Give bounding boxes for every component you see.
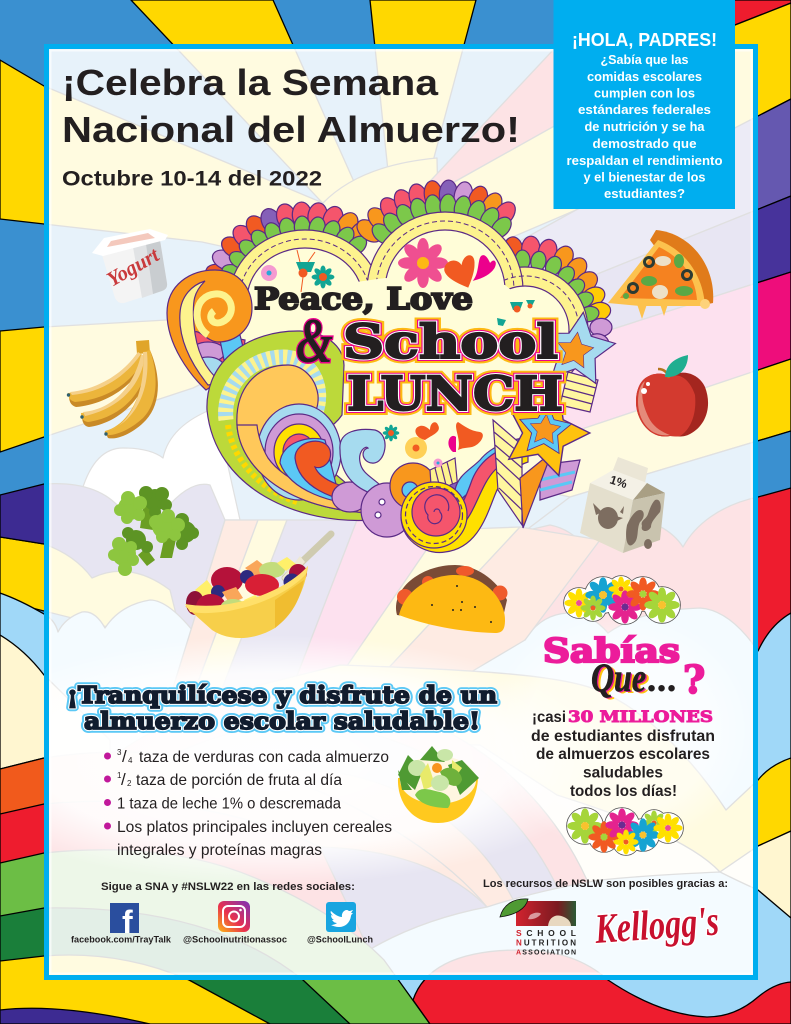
heading: tranquilicese: almuerzo escolar saludable!	[84, 708, 480, 735]
logo: stitched yellow bands and cream centre	[229, 212, 588, 500]
icon: yogurt	[92, 229, 168, 303]
icon: yogurt: Yogurt	[102, 242, 164, 291]
logo: School: School	[343, 315, 558, 370]
text: 30 millones: 30 MILLONES	[568, 707, 713, 726]
sponsors line: Los recursos de NSLW son posibles gracias a:	[483, 878, 728, 890]
list: lunch requirements: Los platos principales incluyen cereales	[117, 819, 392, 836]
logo: stars	[493, 307, 619, 528]
logo: LUNCH: LUNCH	[347, 367, 563, 422]
callout: hola padres: estándares federales	[578, 102, 711, 117]
icon: apple	[636, 355, 708, 437]
date: Octubre 10-14 del 2022	[62, 168, 322, 190]
heading: tranquilicese: ¡Tranquilícese y disfrute de un	[67, 682, 497, 709]
icon: facebook	[110, 903, 139, 940]
callout: hola padres: respaldan el rendimiento	[566, 153, 723, 168]
logo: LUNCH: LUNCH	[347, 367, 563, 422]
logo: School: School	[343, 315, 558, 370]
icon: instagram	[218, 901, 250, 932]
icon: salad bowl	[398, 746, 479, 823]
icon: broccoli	[108, 486, 199, 576]
heading: tranquilicese: almuerzo escolar saludable!	[84, 708, 480, 735]
list: lunch requirements: 2	[127, 779, 132, 788]
flowers: top cluster	[564, 576, 680, 624]
logo: Peace, Love & School Lunch	[167, 180, 619, 553]
icon: fruit bowl	[185, 534, 331, 638]
list: lunch requirements	[104, 747, 392, 859]
twitter handle: @SchoolLunch	[307, 934, 373, 946]
text: 30 millones: de almuerzos escolares	[536, 746, 710, 763]
heading: Sabias Que: Sabías	[543, 631, 680, 670]
title: Nacional del Almuerzo!	[62, 109, 520, 150]
callout: hola padres	[554, 0, 735, 209]
icon: taco	[396, 565, 508, 633]
callout: hola padres: estudiantes?	[604, 186, 685, 201]
heading: Sabias Que	[543, 631, 705, 702]
icon: bananas	[67, 340, 158, 438]
list: lunch requirements: 1 taza de leche 1% o descremada	[117, 796, 341, 812]
heading: Sabias Que: Que	[592, 656, 648, 701]
logo: scalloped flower petals	[203, 180, 613, 354]
list: lunch requirements: taza de porción de fruta al día	[136, 772, 342, 789]
callout: hola padres: ¿Sabía que las	[600, 52, 688, 67]
list: lunch requirements: /	[122, 747, 127, 766]
logo: School: School	[343, 315, 558, 370]
list: lunch requirements: 1	[117, 771, 122, 780]
logo: Kellogg's: Kellogg's	[593, 898, 720, 953]
logo: School Nutrition Association	[500, 899, 576, 956]
instagram handle: @Schoolnutritionassoc	[183, 934, 287, 946]
heading: Sabias Que: ?	[683, 657, 705, 702]
logo: School Nutrition Association: ASSOCIATION	[516, 950, 576, 956]
callout: hola padres: cumplen con los	[594, 86, 695, 100]
list: lunch requirements: taza de verduras con cada almuerzo	[139, 749, 389, 766]
heading: tranquilicese: ¡Tranquilícese y disfrute de un	[67, 682, 497, 709]
icon: facebook: f	[122, 904, 133, 940]
list: lunch requirements: integrales y proteínas magras	[117, 842, 322, 859]
logo: green swirl with stripes	[207, 331, 372, 520]
callout: hola padres: de nutrición y se ha	[584, 119, 705, 134]
logo: left orange spiral	[167, 270, 252, 390]
logo: ampersand: &	[296, 305, 333, 376]
list: lunch requirements: 3	[117, 748, 122, 757]
logo: small flowers and hearts	[261, 238, 535, 468]
logo: School Nutrition Association: S CHOOL	[516, 928, 576, 938]
logo: LUNCH: LUNCH	[347, 367, 563, 422]
callout: hola padres: demostrado que	[592, 136, 696, 151]
icon: milk carton: 1%	[608, 473, 629, 491]
list: lunch requirements: 4	[128, 756, 133, 765]
icon: pizza slice	[608, 230, 713, 319]
text: 30 millones: todos los días!	[570, 783, 677, 800]
logo: School Nutrition Association: N UTRITION	[516, 938, 576, 948]
heading: tranquilicese	[67, 682, 497, 735]
heading: Sabias Que: Que	[594, 657, 650, 702]
title	[62, 62, 520, 150]
logo: LUNCH: LUNCH	[347, 367, 563, 422]
text: 30 millones: de estudiantes disfrutan	[531, 728, 715, 745]
text: 30 millones	[531, 707, 715, 800]
logo: colourful waves	[237, 404, 385, 513]
facebook handle: facebook.com/TrayTalk	[71, 934, 172, 946]
list: lunch requirements: /	[121, 770, 126, 789]
heading: Sabias Que: ...	[648, 655, 678, 700]
callout: hola padres: comidas escolares	[587, 69, 702, 84]
logo: Peace, Love: Peace, Love	[254, 282, 473, 317]
heading: tranquilicese: almuerzo escolar saludable!	[84, 708, 480, 735]
logo: School: School	[343, 315, 558, 370]
social heading: Sigue a SNA y #NSLW22 en las redes sociales:	[101, 881, 355, 893]
heading: Sabias Que: Que	[591, 655, 646, 700]
icon: milk carton	[580, 457, 665, 553]
title: ¡Celebra la Semana	[62, 62, 439, 103]
callout: hola padres: ¡HOLA, PADRES!	[572, 30, 717, 50]
flowers: bottom cluster	[567, 808, 683, 855]
text: 30 millones: ¡casi	[532, 709, 566, 726]
heading: tranquilicese: ¡Tranquilícese y disfrute de un	[67, 682, 497, 709]
icon: twitter	[326, 902, 356, 932]
text: 30 millones: saludables	[583, 764, 663, 782]
logo: donut, lilac blob and bottom spiral with tail	[361, 438, 528, 553]
callout: hola padres: y el bienestar de los	[584, 170, 706, 184]
